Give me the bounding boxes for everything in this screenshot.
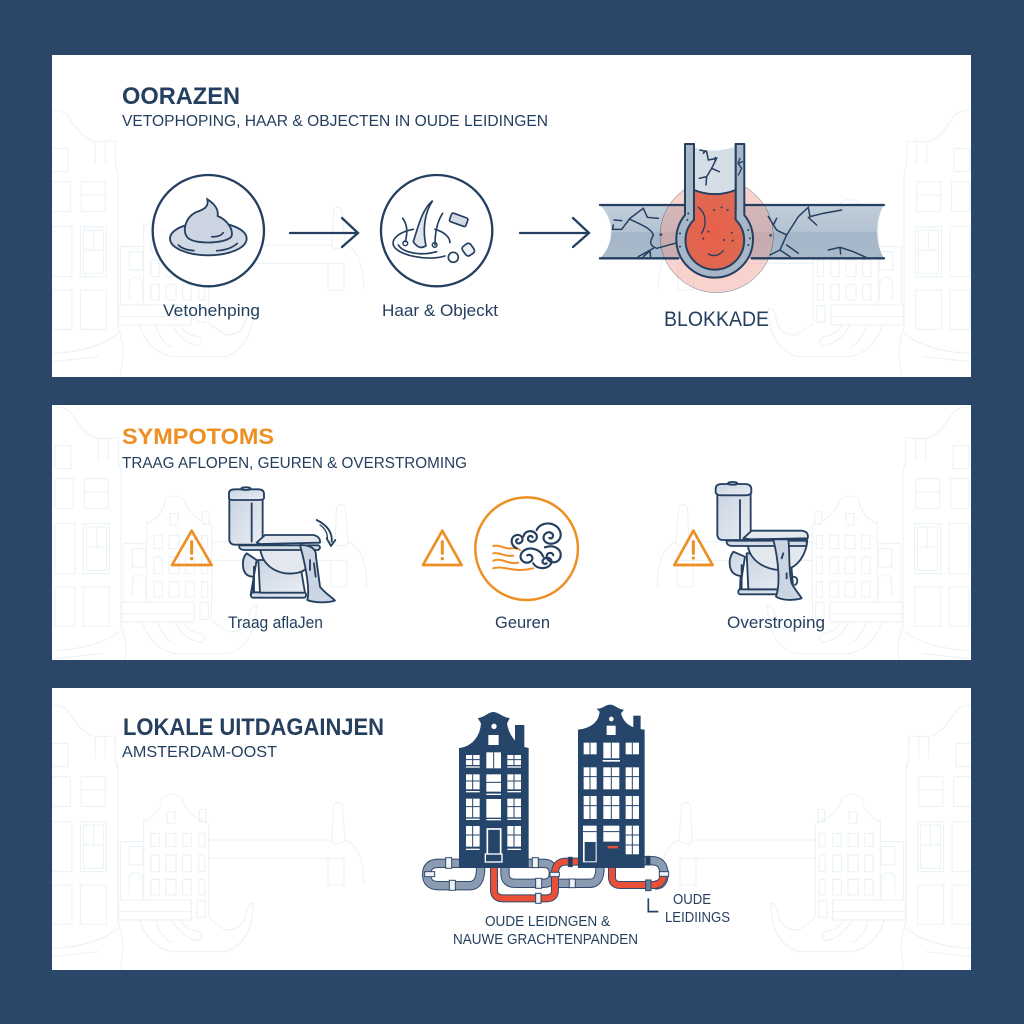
subheading: location: AMSTERDAM-OOST [122, 744, 277, 761]
label: overflow: Overstroping [727, 613, 825, 632]
icon: blocked pipe [600, 144, 884, 293]
label: blockage: BLOKKADE [664, 308, 769, 331]
arrow: hair to blockage [520, 218, 589, 247]
heading: symptoms: SYMPOTOMS [122, 424, 274, 449]
icon: grease circle [153, 175, 264, 286]
illustration: canal houses and pipes [425, 705, 669, 912]
subheading: symptoms: TRAAG AFLOPEN, GEUREN & OVERSTROMING [122, 455, 467, 472]
icon: odour circle [475, 497, 578, 600]
label: grease: Vetohehping [163, 301, 260, 320]
building: left canal house [459, 712, 528, 868]
pipe connectors [425, 856, 669, 903]
icon: warning 2 [423, 531, 462, 565]
building: right canal house [578, 705, 644, 868]
label: old pipes line 2: LEIDIINGS [665, 909, 730, 926]
subheading: causes: VETOPHOPING, HAAR & OBJECTEN IN OUDE LEIDINGEN [122, 113, 548, 130]
icon: overflowing toilet [716, 482, 808, 600]
label: old pipes and narrow houses line 1: OUDE LEIDNGEN & [485, 913, 610, 930]
label: old pipes and narrow houses line 2: NAUWE GRACHTENPANDEN [453, 931, 638, 948]
arrow: grease to hair [290, 218, 358, 247]
icon: hair and objects circle [381, 175, 492, 286]
icon: warning 3 [674, 531, 713, 565]
leader line [648, 898, 658, 912]
icon: warning 1 [172, 531, 212, 565]
label: odours: Geuren [495, 613, 550, 632]
label: slow draining: Traag aflaJen [228, 613, 323, 632]
icon: slow draining toilet [229, 487, 335, 602]
heading: local challenges: LOKALE UITDAGAINJEN [123, 714, 384, 741]
label: old pipes line 1: OUDE [673, 891, 711, 908]
panel: causes [52, 55, 971, 377]
pipes: grey old pipes [427, 848, 664, 898]
heading: causes: OORAZEN [122, 83, 240, 110]
panel: symptoms [52, 405, 971, 672]
label: hair and objects: Haar & Objeckt [382, 301, 498, 320]
panel: local challenges [52, 688, 972, 970]
